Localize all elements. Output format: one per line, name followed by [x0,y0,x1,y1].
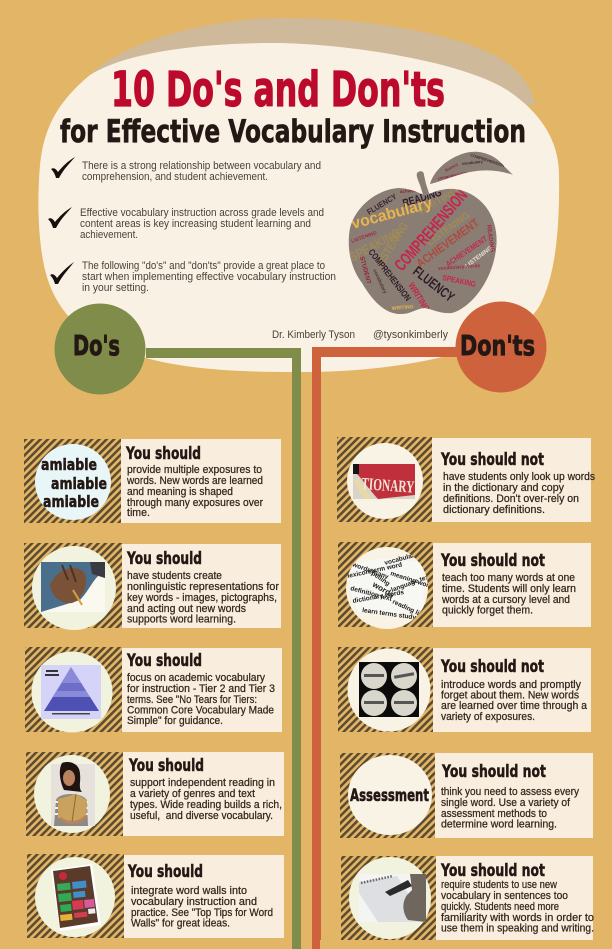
intro point 3 [82,260,336,294]
icon: amiable words: amiable [41,455,97,474]
icon: word cloud apple: vocabulary words [438,263,481,272]
body text: terms. See "No Tears for Tiers: [127,694,257,706]
intro point 2 [80,207,324,241]
body text: a variety of genres and text [130,788,256,800]
icon: word cloud apple: LISTENING [425,210,472,248]
orange connector line [312,347,460,949]
panel: don't 3 [338,647,591,732]
panel: don't 2 [338,542,591,629]
icon: word cloud apple: COMPREHENSION [366,247,413,303]
icon: check mark 2 [48,207,72,228]
body text: determine word learning. [441,818,557,830]
author credit: @tysonkimberly [373,329,449,341]
icon: dictionary book [347,443,423,519]
icon: check mark 3 [50,262,74,284]
body text: variety of exposures. [441,711,535,723]
heading: You should not [440,861,545,881]
body text: use them in speaking and writing. [441,922,594,934]
intro point 3: The following "do's" and "don'ts" provide a great place to [82,260,325,272]
icon: word cloud apple: WRITING [392,304,414,312]
body text [441,679,588,723]
body text: words. New words are learned [126,475,263,487]
icon: word cloud apple: ACHIEVEMENT [444,234,489,269]
header shadow shape [90,18,535,120]
body text: time. Students will only learn [442,583,576,595]
body text: quickly forget them. [442,604,533,616]
icon: pile of words: learn terms study [362,607,417,622]
heading: You should not [441,762,546,782]
body text: and meaning is shaped [127,486,233,498]
body text: introduce words and promptly [441,679,581,691]
icon: word buttons on black [348,648,430,732]
icon: word cloud apple: FLUENCY [365,192,399,217]
intro point 2: achievement. [80,229,138,241]
body text: assessment methods to [441,808,547,820]
body text: focus on academic vocabulary [127,672,265,684]
green connector line [146,348,301,949]
body text: words at a cursory level and [441,594,570,606]
body text [443,471,595,516]
icon: pile of words: language text [390,573,433,594]
icon: word cloud apple: COMPREHENSION [470,152,505,168]
intro point 2: content areas is key increasing student learning and [80,218,311,230]
panel: do 4 [26,752,284,836]
icon: vocabulary tier pyramid [32,652,112,732]
body text: think you need to assess every [441,786,579,798]
body text: for instruction - Tier 2 and Tier 3 [127,683,275,695]
icon: amiable words [35,444,111,520]
Do's badge: Do's [73,329,120,362]
panel: don't 4 [340,753,593,838]
body text: vocabulary in sentences too [441,890,568,902]
icon: pile of words: words [370,579,396,600]
icon: word cloud apple: WRITING [406,281,432,313]
panel: don't 5 [341,856,594,940]
icon: word cloud apple: STUDENT [358,256,371,285]
icon: word cloud apple: ACHIEVEMENT [414,215,482,270]
body text: Simple" for guidance. [127,715,223,727]
body text: provide multiple exposures to [127,464,262,476]
heading: You should [127,862,203,882]
body text [441,572,576,616]
icon: amiable words: amiable [43,492,99,511]
body text [130,777,282,822]
body text: through many exposures over [127,497,263,509]
intro point 1: comprehension, and student achievement. [82,171,268,183]
body text: types. Wide reading builds a rich, [130,799,282,811]
icon: pile of words: lexicon term word [347,562,403,580]
icon: pile of words: words many [350,561,390,581]
author credit [272,329,449,341]
body text: Walls" for great ideas. [131,918,230,930]
body text: nonlinguistic representations for [127,581,279,593]
body text: familiarity with words in order to [441,912,594,924]
icon: check mark 1 [51,157,75,178]
body text: require students to use new [441,879,558,891]
intro point 1 [82,160,321,183]
Do's badge [54,304,146,394]
icon: word cloud apple: SPEAKING [442,273,477,289]
body text [131,885,273,930]
icon: word cloud apple: WRITING [416,186,460,217]
icon: word cloud apple: READING [401,187,443,210]
muted background words are part of the cloud: SPEAKING [346,225,403,265]
body text: support independent reading in [130,777,275,789]
body text: in the dictionary and copy [443,482,564,494]
intro point 3: in your setting. [82,282,149,294]
title: 10 Do's and Don'ts [111,62,445,118]
panel: do 3 [25,647,282,732]
heading: You should [128,756,204,776]
heading: You should not [440,551,545,571]
body text: key words - images, pictographs, [127,592,277,604]
body text: dictionary definitions. [443,504,545,516]
icon: amiable words: amiable [51,474,107,493]
icon: word cloud apple: vocabulary [371,268,388,295]
body text: quickly. Students need more [441,901,559,913]
intro point 1: There is a strong relationship between vocabulary and [82,160,321,172]
icon: assessment label [348,755,432,835]
body text [127,672,275,727]
icon: pile of words [346,547,428,629]
body text: Common Core Vocabulary Made [127,704,274,716]
body text [127,570,279,626]
icon: pile of words: dictionary words [352,589,405,605]
body text: single word. Use a variety of [441,797,571,809]
body text: have students create [127,570,222,582]
body text: definitions. Don't over-rely on [443,493,579,505]
body text: time. [127,507,150,519]
icon: word cloud apple: LISTENING [465,245,494,270]
body text: practice. See "Top Tips for Word [131,907,273,919]
body text: forget about them. New words [441,690,579,702]
icon: assessment label: Assessment [350,786,429,806]
icon: word cloud apple: fluency [444,161,459,173]
icon: hand drawing with pencil [32,546,116,630]
icon: pile of words: spelling [367,568,391,588]
body text: teach too many words at one [442,572,575,584]
panel: do 5 [27,854,284,938]
Don'ts badge [456,302,546,392]
body text [126,464,263,519]
body text: supports word learning. [127,614,236,626]
heading: You should [126,549,202,569]
body text [441,879,594,934]
icon: pile of words: reading list [391,598,426,620]
icon: word cloud apple: COMPREHENSION [391,186,471,275]
heading: You should not [440,450,544,470]
panel: don't 1 [337,437,595,522]
icon: word cloud apple [346,152,513,314]
body text: and acting out new words [127,603,246,615]
heading: You should not [440,657,544,677]
icon: student reading a book [34,755,110,833]
icon: pile of words: vocabulary terms [384,546,438,567]
panel: do 2 [24,543,281,630]
body text: are learned over time through a [441,700,588,712]
body text [441,786,579,830]
icon: word wall photo [35,857,115,937]
icon: pile of words: meaning word [389,570,433,591]
author credit: Dr. Kimberly Tyson [272,329,355,341]
heading: You should [126,651,202,671]
body text: integrate word walls into [131,885,247,897]
icon: word cloud apple: FLUENCY [410,263,458,305]
icon: word cloud apple: achievement [400,187,428,194]
body text: have students only look up words [443,471,595,483]
icon: word cloud apple: vocabulary [350,195,434,233]
icon: word cloud apple: LISTENING [373,220,411,270]
icon: pile of words: definition text [349,585,393,603]
intro point 3: start when implementing effective vocabulary instruction [82,271,336,283]
intro point 2: Effective vocabulary instruction across grade levels and [80,207,324,219]
body text: useful, and diverse vocabulary. [130,810,273,822]
icon: word cloud apple: comprehension [437,170,468,181]
icon: dictionary book: TIONARY [361,474,415,497]
icon: word cloud apple: vocabulary [462,159,484,166]
icon: word cloud apple: READING [485,224,495,253]
panel: do 1 [24,439,281,523]
icon: word cloud apple: LISTENING [351,230,378,245]
body text: vocabulary instruction and [131,896,257,908]
heading: You should [125,444,201,464]
header panel [38,43,559,372]
Don'ts badge: Don'ts [460,329,535,362]
icon: hand writing on notepad [349,857,431,939]
